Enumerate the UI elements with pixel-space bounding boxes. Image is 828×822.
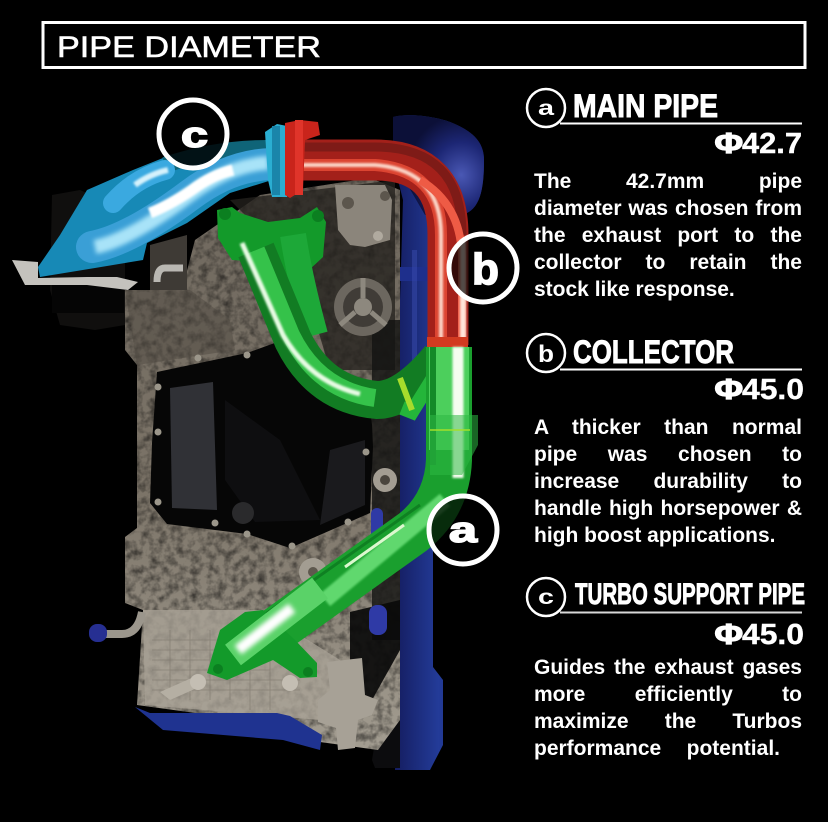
- callout circle a: [429, 496, 497, 564]
- heading: b collector: b: [538, 341, 554, 368]
- body text: c turbo support pipe: performance potential.: [534, 737, 780, 760]
- heading: b collector: 45.0: [742, 374, 804, 406]
- heading: a main pipe: MAIN PIPE: [573, 88, 718, 124]
- heading: c turbo support pipe: c: [538, 586, 554, 609]
- panel: a main pipe: [526, 88, 802, 301]
- heading: c turbo support pipe: Φ: [714, 618, 743, 650]
- heading: b collector: [526, 332, 804, 406]
- engine: blue timing cover: [372, 115, 484, 770]
- callout circle c: [159, 100, 227, 168]
- panel: c turbo support pipe: [526, 576, 805, 760]
- title bar: PIPE DIAMETER: [57, 31, 321, 64]
- heading: a main pipe: Φ: [714, 127, 743, 159]
- engine: blue lower cover: [135, 707, 322, 750]
- heading: a main pipe: [526, 88, 802, 160]
- body text: a main pipe: The 42.7mm pipe: [534, 170, 802, 193]
- heading: b collector: COLLECTOR: [573, 334, 734, 370]
- body text: b collector: A thicker than normal: [534, 416, 802, 439]
- pipe b: red collector: [285, 120, 468, 349]
- heading: a main pipe: a: [538, 97, 554, 120]
- panel: b collector: [526, 332, 804, 547]
- body text: b collector: [534, 416, 802, 547]
- body text: b collector: handle high horsepower &: [534, 497, 802, 520]
- body text: a main pipe: the exhaust port to the: [534, 224, 802, 247]
- heading: b collector: Φ: [714, 373, 743, 405]
- title bar: [42, 21, 806, 69]
- callout circle a: a: [449, 509, 478, 550]
- callout circle b: [449, 234, 517, 302]
- body text: a main pipe: diameter was chosen from: [534, 197, 802, 220]
- body text: b collector: increase durability to: [534, 470, 802, 493]
- engine: black oil pan: [150, 340, 373, 550]
- body text: b collector: pipe was chosen to: [534, 443, 802, 466]
- engine: blue hoses and left pipe: [89, 508, 387, 642]
- body text: c turbo support pipe: [534, 656, 802, 760]
- body text: a main pipe: [534, 170, 802, 301]
- heading: c turbo support pipe: [526, 576, 805, 651]
- body text: c turbo support pipe: Guides the exhaust gases: [534, 656, 802, 679]
- engine: turbo inlet dark housing: [50, 190, 125, 330]
- heading: a main pipe: 42.7: [742, 128, 802, 160]
- body text: b collector: high boost applications.: [534, 524, 776, 547]
- callout circle b: b: [472, 245, 499, 294]
- pipe c: blue turbo support pipe: [38, 124, 287, 277]
- body text: c turbo support pipe: maximize the Turbos: [534, 710, 802, 733]
- heading: c turbo support pipe: 45.0: [742, 619, 804, 651]
- engine: cast aluminium block: [125, 178, 400, 750]
- callout circle c: c: [181, 114, 208, 155]
- body text: c turbo support pipe: more efficiently to: [534, 683, 802, 706]
- body text: a main pipe: stock like response.: [534, 278, 735, 301]
- body text: a main pipe: collector to retain the: [534, 251, 802, 274]
- silver bracket: [12, 260, 138, 290]
- pipe a: green main pipe upper branch: [217, 207, 443, 412]
- engine: silver alternator and bosses: [160, 468, 397, 750]
- engine: accessory housing and idler disc: [334, 185, 392, 336]
- pipe a: green main pipe lower section: [207, 347, 478, 680]
